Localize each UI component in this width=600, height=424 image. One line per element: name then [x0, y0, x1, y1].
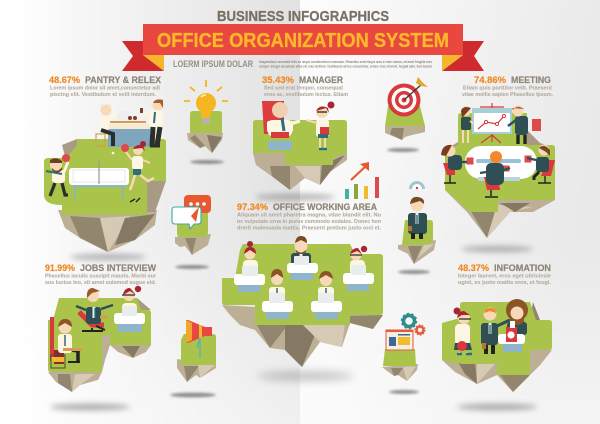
person: left seated [441, 145, 467, 183]
text block: jobs interview: JOBS INTERVIEW [80, 263, 156, 274]
worker: man front right [311, 271, 342, 319]
red document [532, 119, 541, 131]
person: presenter [508, 106, 528, 144]
person: sitting at counter [96, 104, 118, 146]
icon: orange gear [415, 325, 425, 335]
icon: gauge [409, 181, 425, 189]
island: jobs interview [48, 286, 151, 410]
island: manager [253, 101, 347, 200]
island: light bulb [184, 80, 228, 164]
presentation board with chart [472, 103, 512, 143]
text block: jobs interview: 91.99% [45, 263, 76, 274]
person: secretary [306, 102, 334, 149]
worker: bearded man [287, 236, 318, 280]
text block: pantry: 48.67% [49, 75, 81, 86]
subtitle description: semper. Integer accumsan vitae est cras eleifend. Vestibulum ad leo consectetur, ornare cras sit amet, feugiat odio. Sed mauris [259, 64, 432, 68]
pantry counter [106, 111, 150, 147]
text block: meeting: vitae mollis sapien Phasellus ipsum. [462, 92, 553, 98]
person: bearded player [46, 154, 70, 196]
icon: target with arrow [388, 77, 428, 116]
icon: speech bubble orange [184, 195, 211, 213]
worker: man front left [262, 269, 293, 319]
person: candidate seated [50, 317, 82, 368]
icon: growth chart with arrow [345, 162, 379, 199]
text block: office working area [237, 202, 382, 232]
person: standing with coffee [140, 99, 164, 146]
island: standing person with gauge [398, 181, 436, 274]
island: information [442, 299, 552, 410]
subtitle description [259, 60, 432, 68]
text block: manager: 35.43% [262, 75, 295, 86]
person: businessman with briefcase [408, 197, 427, 239]
island: office working area [222, 236, 383, 380]
text block: manager: Sed sed erat tempor, consequat [264, 86, 343, 92]
text block: manager [262, 75, 348, 98]
text block: jobs interview: Phasellus iaculis suscipit mauris. Morbi our [45, 274, 157, 280]
title ribbon: OFFICE ORGANIZATION SYSTEM [157, 30, 449, 52]
person: interviewer woman at desk [114, 286, 145, 332]
text block: office working area: OFFICE WORKING AREA [273, 202, 377, 213]
text block: information [458, 263, 551, 286]
text block: office working area: Aliquam sit amet pharetra magna, vitae blandit elit. Nu [237, 212, 382, 218]
person: woman player [121, 141, 154, 202]
island: target [385, 77, 428, 152]
text block: pantry: PANTRY & RELEX [85, 75, 162, 86]
text block: information: Integer laoreet, eros eget ultriciesle [458, 274, 551, 280]
island: gears and screen [382, 314, 425, 394]
text block: pantry: Lorem ipsum dolor sit amet,consectetur adi [50, 86, 160, 92]
worker: woman left [234, 241, 265, 292]
text block: meeting: MEETING [511, 75, 551, 86]
icon: teal gear [402, 314, 416, 328]
text block: office working area: 97.34% [237, 202, 269, 213]
ping pong table [69, 152, 129, 200]
person: bearded man at desk [498, 299, 528, 352]
text block: information: ugiet, ex justo mattis eros, et feugi. [458, 280, 551, 286]
text block: information: 48.37% [458, 263, 490, 274]
island: pantry and relax [44, 99, 166, 260]
island: meeting [441, 103, 555, 252]
text block: jobs interview: sus luctus leo, sit amet euismod augue eid. [45, 280, 156, 286]
person: woman beside board [461, 106, 474, 143]
text block: manager: MANAGER [299, 75, 343, 86]
heading: business infographics: BUSINESS INFOGRAPHICS [217, 8, 389, 25]
icon: white chat bubble [172, 207, 201, 229]
icon: screen [386, 330, 413, 350]
worker: woman right [343, 246, 374, 291]
text block: meeting [462, 75, 553, 98]
person: man with briefcase [481, 308, 510, 354]
meeting table [465, 146, 537, 181]
icon: megaphone [186, 320, 212, 358]
person: right seated [527, 144, 555, 183]
text block: manager: eros ac, vestibulum lectus. Etiam [264, 92, 348, 98]
icon: bulb [184, 80, 228, 124]
text block: meeting: Etiam quis porttitor velit. Praesent [463, 86, 552, 92]
island: megaphone [170, 320, 216, 397]
text block: pantry: piscing elit. Vestibulum et velit interdum. [50, 92, 156, 98]
subtitle description: Suspendisse venenatis felis eu neque condimentum commodo. Phasellus scelerisque arcu a enim rutrum, sit amet fringilla eros [259, 60, 432, 64]
island: chat [172, 207, 211, 269]
person: manager in chair [262, 101, 300, 150]
text block: office working area: nc vulputate urna in purus commodo sodales. Donec hen [237, 219, 382, 225]
subtitle: LOERM IPSUM DOLAR [173, 59, 253, 69]
person: interviewer in chair [76, 288, 113, 331]
person: centre seated [480, 151, 510, 197]
text block: pantry [49, 75, 162, 98]
text block: jobs interview [45, 263, 157, 286]
title ribbon [122, 24, 484, 71]
text block: meeting: 74.86% [474, 75, 507, 86]
text block: office working area: drerit malesuada mattis. Praesent pretium justo orci et. [237, 226, 381, 232]
text block: information: INFOMATION [494, 263, 551, 274]
person: woman with handbag [454, 308, 472, 354]
